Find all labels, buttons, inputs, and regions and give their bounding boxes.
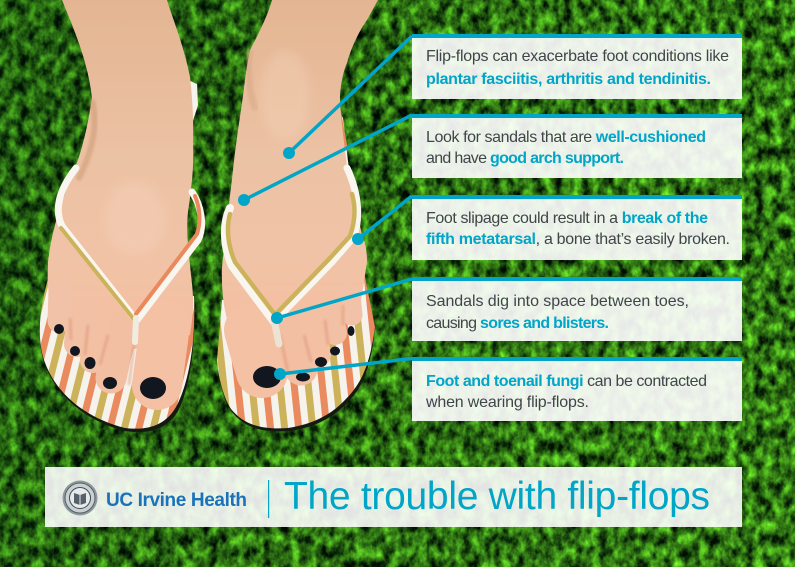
- text box 2: [412, 114, 742, 178]
- text box 2: Look for sandals that are well-cushioned: [426, 129, 706, 146]
- text box 5: Foot and toenail fungi can be contracted: [426, 373, 707, 390]
- pointer line and dot 5: [274, 358, 412, 380]
- bottom title banner: [45, 467, 742, 527]
- left flip-flop sole: [40, 80, 198, 432]
- right foot shading: [248, 50, 343, 372]
- icon: university seal: [62, 480, 98, 516]
- left toenails: [54, 324, 166, 399]
- left foot shading: [70, 100, 165, 385]
- text box 5: when wearing flip-flops.: [425, 394, 589, 411]
- right flip-flop straps: [225, 168, 358, 344]
- callout 4: sores and blisters: [271, 277, 742, 341]
- text box 1: plantar fasciitis, arthritis and tendinitis.: [426, 71, 711, 88]
- right flip-flop sole: [217, 106, 375, 431]
- left flip-flop straps: [58, 168, 202, 342]
- text box 2: and have good arch support.: [426, 150, 624, 167]
- right toenails: [253, 326, 354, 388]
- callout 3: fifth metatarsal: [352, 195, 742, 260]
- left foot skin: [48, 0, 193, 385]
- text box 1: [412, 34, 742, 99]
- text box 4: [412, 277, 742, 341]
- pointer line and dot 3: [352, 196, 412, 245]
- callout 5: toenail fungi: [274, 357, 742, 421]
- pointer line and dot 2: [238, 115, 412, 206]
- title: The trouble with flip-flops: [284, 475, 710, 518]
- pointer line and dot 1: [283, 36, 412, 159]
- text box 5: [412, 357, 742, 421]
- text box 4: causing sores and blisters.: [426, 315, 609, 332]
- text box 3: [412, 195, 742, 260]
- text box 1: Flip-flops can exacerbate foot conditions like: [426, 48, 729, 65]
- right foot in striped flip-flop: [217, 0, 378, 431]
- UC Irvine Health logotype: UC Irvine Health: [106, 490, 247, 511]
- pointer line and dot 4: [271, 279, 412, 324]
- callout 2: cushioned sandals: [238, 114, 742, 206]
- text box 3: fifth metatarsal, a bone that’s easily broken.: [426, 231, 730, 248]
- right foot skin: [222, 0, 378, 372]
- left foot in striped flip-flop: [40, 0, 202, 432]
- text box 4: Sandals dig into space between toes,: [426, 293, 689, 310]
- text box 3: Foot slipage could result in a break of the: [426, 210, 708, 227]
- callout 1: foot conditions: [283, 34, 742, 159]
